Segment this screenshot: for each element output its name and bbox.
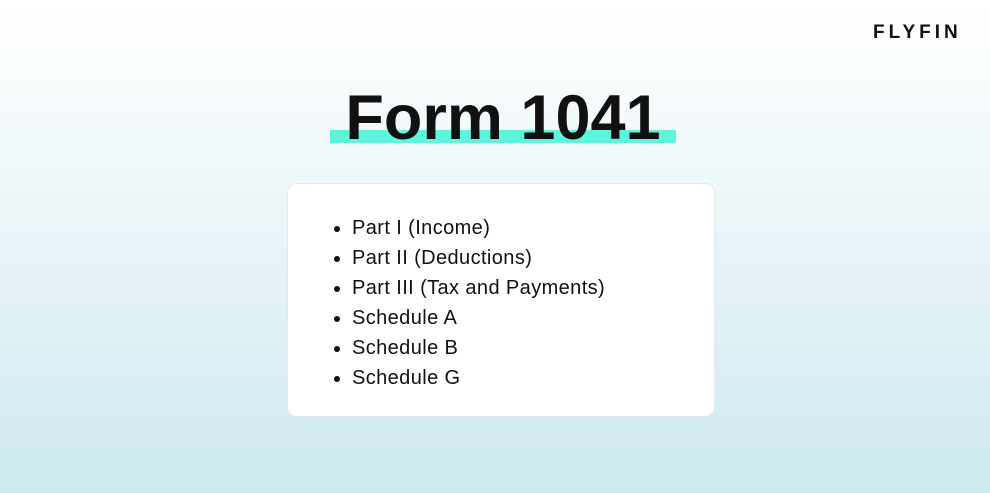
list: Schedule G (352, 367, 461, 389)
list: Part III (Tax and Payments) (352, 277, 605, 299)
panel: list card (287, 183, 715, 417)
title: Form 1041 (345, 83, 661, 153)
list: Schedule B (352, 337, 458, 359)
list (334, 217, 605, 389)
list: Part I (Income) (352, 217, 490, 239)
list: Schedule A (352, 307, 457, 329)
list: Part II (Deductions) (352, 247, 532, 269)
logo: FLYFIN (873, 22, 962, 43)
